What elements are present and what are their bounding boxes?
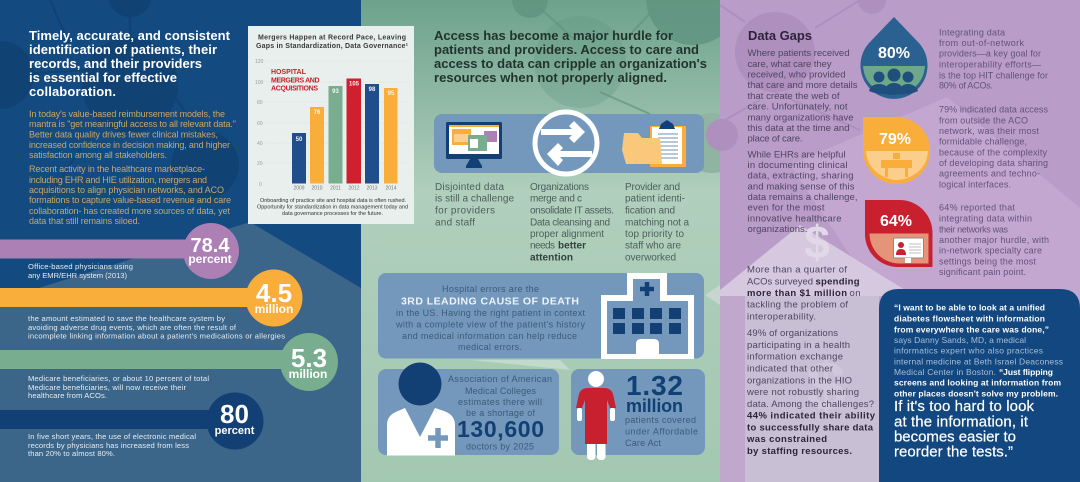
text: provider and patient identification: overworked <box>625 252 676 263</box>
icon: 79% drop: 79% <box>879 131 911 148</box>
text block: value-based models: increased confidence in decision making, and higher <box>29 140 230 150</box>
chart: hospital mergers and acquisitions: 120 <box>255 59 264 65</box>
stat: 80 percent <box>0 392 264 458</box>
text: doctor shortage: Association of American <box>448 374 552 384</box>
stat: 4.5 million: the amount estimated to save the healthcare system by <box>28 314 225 323</box>
text: 64% within networks: another major hurdle, with <box>939 235 1049 245</box>
text: 64% within networks: their networks was <box>939 224 1008 234</box>
text: spending more than $1 million: tackling the problem of <box>747 300 848 311</box>
stat: 78.4 percent: any EMR/EHR system (2013) <box>28 271 127 280</box>
text: hospital errors: Hospital errors are the <box>442 284 539 294</box>
text: disjointed data: and staff <box>435 217 475 228</box>
text: 79% data access: agreements and techno- <box>939 169 1040 179</box>
chart: hospital mergers and acquisitions: 80 <box>257 100 263 106</box>
heading: access hurdle <box>434 28 707 85</box>
text: data gaps paragraph two: even for the most <box>748 203 825 214</box>
stat: 78.4 percent: 78.4 <box>191 235 230 257</box>
quote text: Medical Center in Boston. <box>894 367 996 377</box>
icon: patient in gown <box>576 371 616 460</box>
quote emphasis: If it's too hard to look <box>894 398 1034 415</box>
text: disjointed data: Disjointed data <box>435 182 504 193</box>
text block: recent activity: acquisitions to align physician networks, and ACO <box>29 185 224 195</box>
stat: 5.3 million: Medicare beneficiaries, or about 10 percent of total <box>28 374 209 383</box>
text: data gaps paragraph one: received, who provided <box>748 70 846 80</box>
text: 79% data access: network, was their most <box>939 126 1039 136</box>
text: data gaps paragraph two <box>748 149 858 235</box>
text: spending more than $1 million: ACOs surveyed <box>747 276 813 287</box>
text: spending more than $1 million <box>747 265 860 322</box>
text: organizations merge: merge and c <box>530 194 582 205</box>
text: organizations merge: onsolidate IT assets. <box>530 205 614 216</box>
quote emphasis: reorder the tests.” <box>894 443 1013 460</box>
text: provider and patient identification: top priority to <box>625 229 684 240</box>
text: 80% of ACOs: interoperability efforts— <box>939 59 1041 69</box>
text block: value-based models <box>29 109 236 160</box>
text: health information exchange: indicated that other <box>747 363 833 374</box>
panel: icon band <box>434 112 704 174</box>
quote emphasis: becomes easier to <box>894 428 1016 445</box>
chart bars: 2011 <box>330 186 341 192</box>
quote text: from everywhere the care was done,” <box>894 324 1049 334</box>
icon: folder and clipboard <box>622 120 686 167</box>
text block: value-based models: satisfaction among all stakeholders. <box>29 150 167 160</box>
quote text: other places doesn't solve my problem. <box>894 389 1058 399</box>
text block: recent activity: including EHR and HIE utilization, mergers and <box>29 175 207 185</box>
chart: hospital mergers and acquisitions: 60 <box>257 121 263 127</box>
stat: 80 percent: than 20% to almost 80%. <box>28 449 115 458</box>
panel: right background <box>706 0 1080 482</box>
chart bars: 105 <box>349 82 360 88</box>
heading: access hurdle: patients and providers. Access to care and <box>434 42 699 57</box>
text: health information exchange: participating in a health <box>747 340 850 351</box>
text: organizations merge <box>530 182 614 263</box>
chart caption: data governance processes for the future. <box>282 211 383 217</box>
text: provider and patient identification: fication and <box>625 205 675 216</box>
text: health information exchange: by staffing resources. <box>747 446 852 457</box>
chart title: Mergers Happen at Record Pace, Leaving <box>258 34 406 42</box>
heading: timely identification: Timely, accurate, and consistent <box>29 28 231 43</box>
chart: hospital mergers and acquisitions: 20 <box>257 161 263 167</box>
text: hospital errors: medical errors. <box>458 342 522 352</box>
text: health information exchange <box>746 328 876 457</box>
text: data gaps paragraph one: care, what care they <box>748 59 832 70</box>
icon: exchange arrows <box>535 112 597 174</box>
stat: 80 percent: In five short years, the use of electronic medical <box>28 432 196 441</box>
quote text <box>894 303 1063 399</box>
panel: patients covered <box>571 369 705 460</box>
stat: 4.5 million: incomplete linking information about a patient's medications or allergies <box>28 332 285 340</box>
quote text: diabetes flowsheet with information <box>894 313 1045 323</box>
quote text: informatics expert who also practices <box>894 346 1043 356</box>
stat: 80 percent: records by physicians has increased from less <box>28 441 189 450</box>
text: data gaps paragraph one: care. Unfortunately, not <box>748 102 848 112</box>
text: 80% of ACOs <box>939 27 1048 91</box>
text: 64% within networks: 64% reported that <box>939 203 1015 213</box>
chart caption <box>257 198 408 217</box>
heading: access hurdle: resources when not properly aligned. <box>434 70 667 85</box>
text: hospital errors: with a complete view of the patient's history <box>395 320 586 330</box>
text: health information exchange: organizations in the HIO <box>747 375 852 386</box>
text: doctor shortage: estimates there will <box>458 397 542 407</box>
icon: doctor <box>387 362 455 456</box>
stat: 78.4 percent <box>0 223 239 280</box>
text: disjointed data: is still a challenge <box>435 194 514 205</box>
text block: recent activity: Recent activity in the healthcare marketplace- <box>29 164 205 174</box>
text: doctor shortage: be a shortage of <box>466 408 535 418</box>
chart bars: 95 <box>388 91 395 97</box>
text: spending more than $1 million: interoperability. <box>747 311 816 322</box>
text: 64% within networks: integrating data within <box>939 214 1032 224</box>
callout: quote <box>879 289 1080 482</box>
chart bars: 2009 <box>293 186 305 192</box>
chart: hospital mergers and acquisitions: 100 <box>255 80 264 86</box>
text: data gaps paragraph one: Where patients received <box>748 48 850 59</box>
panel: left background <box>0 0 361 482</box>
text: spending more than $1 million: more than $1 million <box>747 288 847 299</box>
text: 80% of ACOs: providers—a key goal for <box>939 49 1041 59</box>
chart title: Gaps in Standardization, Data Governance¹ <box>256 43 409 50</box>
icon: 64% drop: 64% <box>880 213 912 230</box>
text: organizations merge: needs <box>530 241 555 252</box>
text: health information exchange: data. Among the challenges? <box>747 399 874 410</box>
stat: 4.5 million: million <box>255 302 293 316</box>
text: data gaps paragraph one: that create the web of <box>748 91 840 102</box>
stat: 4.5 million <box>0 270 302 340</box>
quote text: screens and looking at information from <box>894 378 1061 388</box>
text: provider and patient identification: staff who are <box>625 241 681 252</box>
stat: 5.3 million: healthcare from ACOs. <box>28 391 107 400</box>
text: 64% within networks: in-network specialty care <box>939 246 1042 256</box>
heading: data gaps: Data Gaps <box>748 28 812 43</box>
icon: 80% drop: 80% <box>878 45 910 62</box>
text: health information exchange: 49% of organizations <box>747 328 838 339</box>
icon: 64% drop <box>865 200 933 267</box>
text: hospital errors: in the US. Having the right patient in context <box>396 308 585 318</box>
text: 79% data access: logical interfaces. <box>939 179 1011 189</box>
text: doctor shortage <box>448 374 552 452</box>
quote emphasis <box>894 398 1034 460</box>
chart bars: 50 <box>296 137 303 143</box>
text block: recent activity: formations to capture value-based revenue and care <box>29 195 231 205</box>
icon: hospital <box>601 273 694 359</box>
text: organizations merge: better <box>558 241 586 252</box>
text: hospital errors: 3RD LEADING CAUSE OF DEATH <box>401 296 579 308</box>
heading: access hurdle: Access has become a major hurdle for <box>434 28 673 43</box>
text: health information exchange: were not robustly sharing <box>746 387 859 398</box>
text: 1.32 million: 1.32 <box>626 370 683 401</box>
stat: 4.5 million: avoiding adverse drug events, which are often the result of <box>28 323 237 332</box>
chart bars: 2013 <box>366 186 378 192</box>
text: disjointed data <box>435 182 514 228</box>
text: data gaps paragraph one: this data at the time and <box>748 123 850 134</box>
text: provider and patient identification: patient identi- <box>625 194 685 205</box>
text: 1.32 million: under Affordable <box>625 426 698 436</box>
quote text: internal medicine at Beth Israel Deaconess <box>894 356 1063 366</box>
panel: right background: $ <box>804 216 830 268</box>
text: 79% data access: 79% indicated data access <box>939 105 1048 115</box>
heading: timely identification: collaboration. <box>29 84 116 99</box>
text: 1.32 million: patients covered <box>625 415 696 425</box>
text: doctor shortage: 130,600 <box>457 416 544 442</box>
chart title <box>256 34 409 50</box>
panel: middle background <box>361 0 742 482</box>
chart bars: 2010 <box>311 186 323 192</box>
chart bars: 76 <box>314 110 321 116</box>
text: 79% data access: because of the complexity <box>939 147 1048 157</box>
chart label <box>271 69 320 92</box>
text: 64% within networks: settings being the most <box>939 256 1036 266</box>
chart caption: Opportunity for standardization in data management today and <box>257 204 408 210</box>
text: 80% of ACOs: 80% of ACOs. <box>939 81 993 91</box>
chart: hospital mergers and acquisitions: 0 <box>259 182 262 188</box>
chart: hospital mergers and acquisitions <box>248 26 414 224</box>
heading: timely identification: is essential for effective <box>29 70 177 85</box>
stat: 78.4 percent: percent <box>188 252 232 266</box>
text: hospital errors <box>395 284 586 352</box>
text block: recent activity: data that still remains siloed. <box>29 216 140 226</box>
quote text: “Just flipping <box>999 367 1053 377</box>
quote text: “I want to be able to look at a unified <box>894 303 1045 313</box>
icon: 80% drop <box>861 17 928 99</box>
text: doctor shortage: doctors by 2025 <box>466 442 534 452</box>
text: doctor shortage: Medical Colleges <box>465 386 536 396</box>
text: 79% data access <box>939 105 1048 189</box>
text: data gaps paragraph one <box>748 48 858 144</box>
text: organizations merge: Data cleansing and <box>530 217 610 228</box>
text block: value-based models: In today's value-based reimbursement models, the <box>29 109 225 119</box>
text: 79% data access: formidable challenge, <box>939 137 1027 147</box>
panel: hospital errors <box>378 273 704 359</box>
heading: timely identification: identification of patients, their <box>29 42 217 57</box>
text: spending more than $1 million: on <box>850 288 860 299</box>
text: 80% of ACOs: is the top HIT challenge for <box>939 70 1048 80</box>
text: data gaps paragraph one: many organizations have <box>748 112 854 124</box>
panel: doctor shortage <box>378 362 559 456</box>
text block: recent activity: collaboration- has created more sources of data, yet <box>29 206 230 216</box>
text: 80% of ACOs: Integrating data <box>939 27 1005 37</box>
text block: value-based models: mantra is "get meaningful access to all relevant data." <box>29 119 236 129</box>
icon: 79% drop <box>863 117 930 184</box>
text: organizations merge: attention <box>530 252 573 263</box>
stat: 5.3 million <box>0 333 338 400</box>
text: hospital errors: and medical information can help reduce <box>402 331 577 341</box>
text: provider and patient identification <box>625 182 689 263</box>
text block: recent activity <box>29 164 231 226</box>
text: data gaps paragraph two: organizations. <box>748 224 808 235</box>
text: 64% within networks <box>939 203 1049 277</box>
text: data gaps paragraph two: data remains a challenge, <box>748 192 858 203</box>
chart bars: 2012 <box>348 186 360 192</box>
chart: hospital mergers and acquisitions: 40 <box>257 141 263 147</box>
quote text: says Danny Sands, MD, a medical <box>894 335 1026 345</box>
stat: 5.3 million: Medicare beneficiaries, will now receive their <box>28 383 186 392</box>
stat: 78.4 percent: Office-based physicians using <box>28 262 133 271</box>
text: disjointed data: for providers <box>435 205 495 216</box>
stat: 4.5 million: 4.5 <box>256 278 292 308</box>
text: data gaps paragraph two: While EHRs are helpful <box>748 149 846 160</box>
icon: monitor <box>446 122 502 168</box>
text: data gaps paragraph two: innovative healthcare <box>748 213 842 224</box>
text: provider and patient identification: Provider and <box>625 182 680 193</box>
panel: right background: $ <box>807 347 845 425</box>
heading: timely identification <box>29 28 231 99</box>
stat: 5.3 million: 5.3 <box>291 343 327 373</box>
chart label: ACQUISITIONS <box>271 86 318 92</box>
chart bars: 98 <box>369 87 376 93</box>
text: provider and patient identification: matching not a <box>625 217 689 228</box>
text: health information exchange: 44% indicated their ability <box>747 411 876 422</box>
text: data gaps paragraph two: data, extracting, sharing <box>748 171 854 182</box>
text: 1.32 million <box>625 370 698 448</box>
stat: 80 percent: percent <box>215 425 255 437</box>
text: spending more than $1 million: spending <box>816 276 860 287</box>
text: 1.32 million: million <box>626 396 683 416</box>
chart label: MERGERS AND <box>271 78 320 84</box>
chart label: HOSPITAL <box>271 69 307 76</box>
text: 64% within networks: significant pain point. <box>939 267 1026 277</box>
chart bars: 2014 <box>385 186 397 192</box>
chart bars <box>292 78 398 192</box>
chart bars: 93 <box>332 89 339 95</box>
text: health information exchange: was constrained <box>746 434 827 445</box>
text: data gaps paragraph one: that care and more details <box>748 80 858 91</box>
stat: 5.3 million: million <box>289 367 327 381</box>
text: 79% data access: of developing data sharing <box>939 158 1048 168</box>
text: 80% of ACOs: from out-of-network <box>939 38 1024 48</box>
text: data gaps paragraph two: and making sense of this <box>748 181 855 192</box>
text: spending more than $1 million: More than a quarter of <box>747 265 847 276</box>
text: organizations merge: Organizations <box>530 182 589 193</box>
chart caption: Onboarding of practice site and hospital data is often rushed. <box>260 198 406 204</box>
text: 1.32 million: Care Act <box>625 438 661 448</box>
text: health information exchange: information exchange <box>747 352 843 363</box>
text: health information exchange: to successfully share data <box>747 422 874 433</box>
text: data gaps paragraph two: in documenting clinical <box>748 160 848 171</box>
heading: access hurdle: access to data can cripple an organization's <box>434 56 707 71</box>
text: organizations merge: proper alignment <box>530 229 604 240</box>
heading: timely identification: records, and their providers <box>29 56 202 71</box>
quote emphasis: at the information, it <box>894 413 1029 430</box>
stat: 80 percent: 80 <box>220 399 249 429</box>
text block: value-based models: Better data quality drives fewer clinical mistakes, <box>29 130 218 140</box>
text: 79% data access: from outside the ACO <box>939 115 1028 125</box>
text: data gaps paragraph one: place of care. <box>748 134 802 144</box>
